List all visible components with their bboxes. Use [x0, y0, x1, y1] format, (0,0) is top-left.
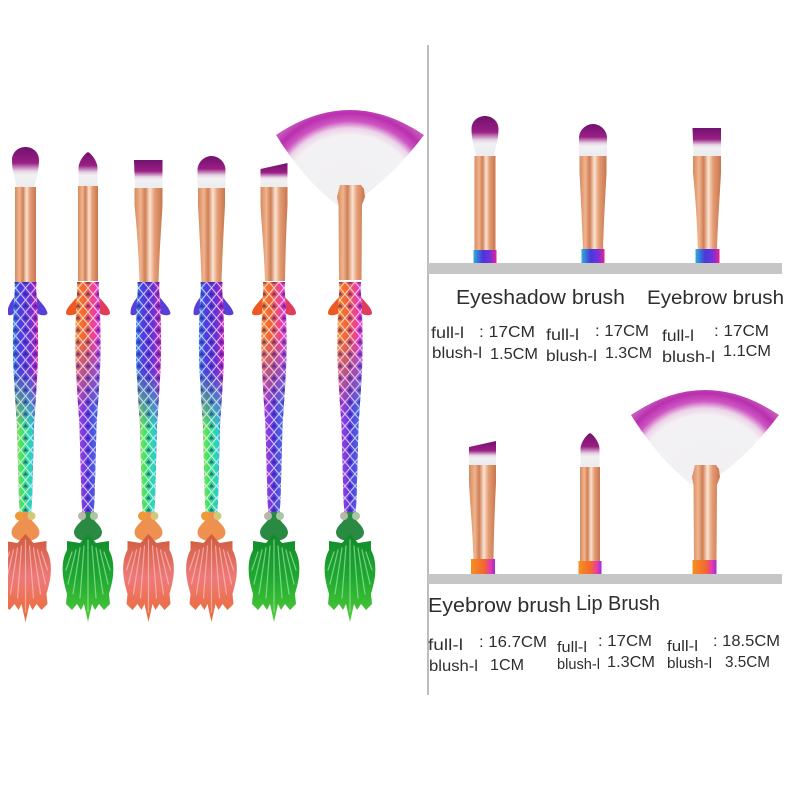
specs: top column 3: 1.1CM	[723, 343, 771, 360]
specs: bottom column 2: : 17CM	[598, 633, 652, 650]
brush: flat eyebrow	[692, 128, 721, 263]
vertical divider	[427, 45, 429, 695]
specs: top column 3: full-l	[662, 328, 694, 345]
specs: bottom column 1: blush-l	[429, 658, 478, 675]
specs: bottom column 2	[557, 633, 655, 673]
shelf: top	[428, 263, 782, 274]
specs: bottom column 3: : 18.5CM	[713, 633, 780, 650]
specs: top column 2: 1.3CM	[605, 345, 652, 362]
specs: top column 1: full-l	[431, 325, 464, 342]
brush: fan	[631, 390, 779, 574]
brush: angled eyebrow	[469, 441, 496, 574]
specs: bottom column 3: 3.5CM	[725, 654, 770, 671]
specs: top column 1	[431, 324, 538, 363]
specs: bottom column 1: : 16.7CM	[479, 634, 547, 651]
panel: top row detail brushes	[428, 116, 782, 274]
brush 2: cone lip brush	[63, 152, 113, 622]
specs: top column 2	[546, 323, 652, 365]
brush 4: dome eyeshadow	[186, 156, 237, 622]
specs: bottom column 1: full-l	[428, 637, 463, 654]
specs: top column 3	[662, 323, 771, 366]
specs: top column 1: : 17CM	[479, 324, 535, 341]
heading: Eyeshadow brush: Eyeshadow brush	[456, 287, 625, 309]
shelf: bottom	[428, 574, 782, 584]
specs: bottom column 3: blush-l	[667, 655, 712, 672]
brush: cone lip	[578, 433, 602, 574]
specs: bottom column 3	[667, 633, 780, 672]
panel: bottom row detail brushes	[428, 390, 782, 584]
specs: bottom column 1: 1CM	[490, 657, 524, 674]
specs: top column 2: blush-l	[546, 348, 597, 365]
brush: round eyeshadow	[472, 116, 498, 263]
brush 1: round eyeshadow	[0, 147, 51, 622]
specs: top column 2: full-l	[546, 327, 579, 344]
heading: Eyebrow brush bottom: Eyebrow brush	[428, 595, 571, 617]
specs: top column 1: 1.5CM	[490, 346, 538, 363]
brush 6: fan	[276, 110, 424, 622]
heading: Lip Brush: Lip Brush	[576, 593, 660, 615]
heading: Eyebrow brush top: Eyebrow brush	[647, 288, 784, 309]
brush 5: angled eyebrow	[249, 163, 299, 622]
specs: bottom column 2: full-l	[557, 639, 587, 656]
specs: top column 2: : 17CM	[595, 323, 649, 340]
specs: bottom column 2: blush-l	[557, 656, 600, 673]
specs: bottom column 1	[428, 634, 547, 675]
specs: top column 1: blush-l	[432, 345, 482, 362]
specs: top column 3: blush-l	[662, 349, 715, 366]
specs: top column 3: : 17CM	[714, 323, 769, 340]
specs: bottom column 2: 1.3CM	[607, 654, 655, 671]
panel: six brush set	[0, 110, 424, 630]
specs: bottom column 3: full-l	[667, 638, 698, 655]
brush 3: flat eyebrow	[123, 160, 174, 622]
brush: dome eyeshadow	[579, 124, 607, 263]
